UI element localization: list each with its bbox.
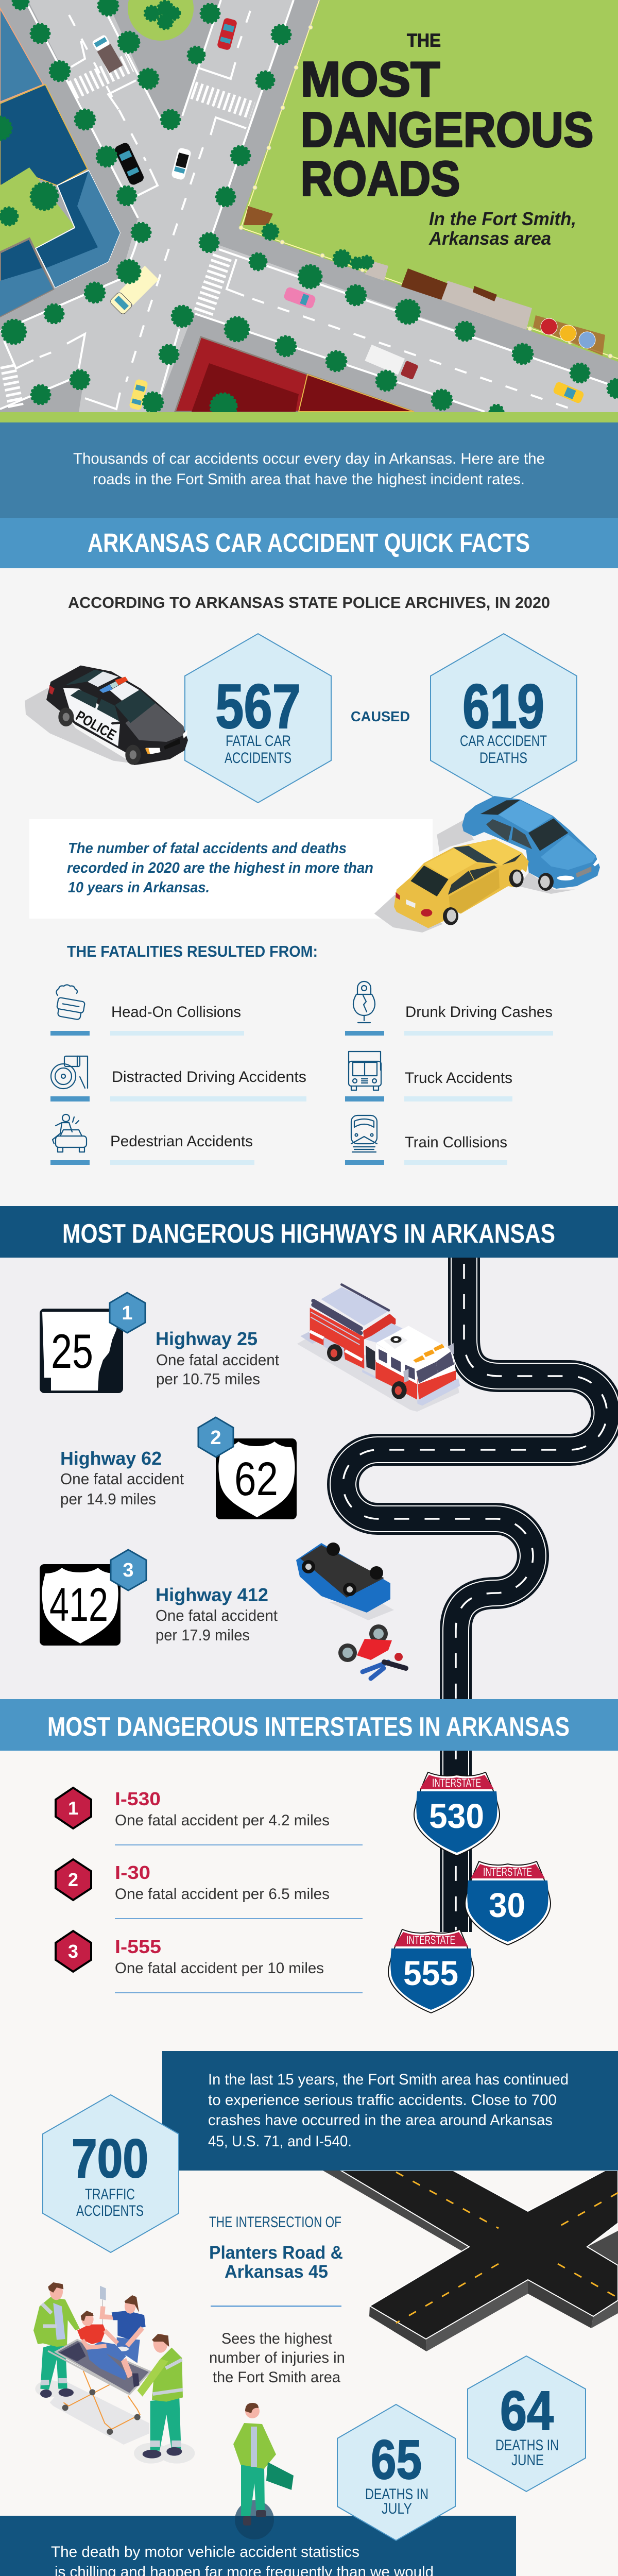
panel backgrounds — [0, 1258, 618, 2576]
green divider band — [0, 412, 618, 422]
road sign: US 412 — [40, 1564, 121, 1646]
callout: highest in 10 years: recorded in 2020 are the highest in more than — [67, 860, 373, 876]
subtitle — [428, 208, 576, 249]
highway 62 text: One fatal accident — [60, 1470, 184, 1488]
stat: 64 deaths in June — [468, 2356, 586, 2492]
highway 412 text: Highway 412 — [156, 1584, 268, 1605]
text: intersection callout — [209, 2214, 345, 2386]
list item: truck accidents — [345, 1052, 512, 1101]
illustration: overturned car — [296, 1543, 394, 1620]
highway 62 text — [60, 1448, 184, 1508]
list item: pedestrian accidents — [50, 1114, 254, 1165]
badge: 1: 1 — [122, 1302, 133, 1324]
stat: 567 fatal accidents: ACCIDENTS — [225, 750, 291, 767]
list item: distracted driving: Distracted Driving Accidents — [112, 1069, 306, 1086]
badge: 3: 3 — [68, 1941, 78, 1962]
vehicles — [92, 18, 585, 411]
heading: quick facts — [0, 518, 618, 568]
list item: distracted driving — [50, 1056, 306, 1101]
grass area — [238, 0, 618, 362]
subheading: archives: ACCORDING TO ARKANSAS STATE POLICE ARCHIVES, IN 2020 — [68, 594, 550, 612]
stat: 567 fatal accidents — [185, 634, 331, 803]
stat: 700 traffic accidents — [43, 2095, 179, 2252]
stat: 65 deaths in July: JULY — [382, 2500, 412, 2517]
panel: Fort Smith crashes: to experience serious traffic accidents. Close to 700 — [208, 2092, 557, 2109]
road sign: interstate 555 — [388, 1929, 474, 2013]
callout: highest in 10 years: The number of fatal accidents and deaths — [68, 840, 347, 857]
paramedic left — [33, 2282, 80, 2398]
panel: death statistics: The death by motor vehicle accident statistics — [51, 2544, 359, 2561]
list item: truck accidents: Truck Accidents — [405, 1070, 512, 1087]
road sign: US 62: 62 — [234, 1453, 278, 1505]
subtitle: Arkansas area — [428, 228, 551, 249]
road sign: interstate 555: INTERSTATE — [406, 1934, 455, 1946]
road edge lines — [0, 0, 618, 412]
item: highway 412 — [40, 1550, 278, 1646]
patient — [77, 2311, 140, 2387]
illustration: paramedics with stretcher — [33, 2282, 195, 2464]
highway 412 text: per 17.9 miles — [156, 1626, 250, 1644]
badge: 2 — [198, 1417, 233, 1457]
building: red — [175, 337, 414, 412]
text: intersection callout: THE INTERSECTION OF — [209, 2214, 341, 2231]
illustration: crashed cars — [374, 796, 600, 933]
highway 25 text: per 10.75 miles — [156, 1370, 260, 1388]
item: I-555: I-555 — [115, 1936, 161, 1957]
title: MOST — [301, 52, 440, 107]
illustration: fire truck — [297, 1284, 460, 1412]
paramedic in blue — [100, 2286, 146, 2363]
badge: 1 — [110, 1293, 145, 1333]
text: intersection callout: the Fort Smith area — [213, 2369, 340, 2386]
icon: truck — [349, 1052, 381, 1090]
road sign: interstate 530: INTERSTATE — [432, 1776, 481, 1789]
highway 412 text: One fatal accident — [156, 1606, 278, 1624]
stat: 64 deaths in June: 64 — [500, 2379, 554, 2442]
badge: 3 — [56, 1931, 91, 1972]
stat: 619 deaths: DEATHS — [479, 750, 527, 767]
badge: 3 — [111, 1550, 146, 1590]
panel: Fort Smith crashes: 45, U.S. 71, and I-540. — [208, 2133, 352, 2150]
list item: drunk driving — [345, 981, 553, 1036]
badge: 2: 2 — [210, 1427, 221, 1449]
list item: head-on collisions — [50, 985, 244, 1036]
connector text: caused: CAUSED — [351, 708, 410, 724]
illustration: 3D intersection — [323, 2171, 618, 2351]
item: I-30 — [56, 1859, 363, 1919]
stat: 619 deaths: 619 — [462, 671, 544, 741]
road sign: Arkansas 25 — [40, 1309, 123, 1393]
icon: overturned car — [56, 985, 85, 1020]
illustration: paramedic with bag — [233, 2403, 294, 2539]
item: I-530 — [56, 1788, 363, 1845]
road sign: US 62 — [216, 1438, 297, 1519]
panel: Fort Smith crashes: In the last 15 years, the Fort Smith area has continued — [208, 2071, 569, 2088]
heading: quick facts: ARKANSAS CAR ACCIDENT QUICK FACTS — [88, 528, 530, 557]
stat: 700 traffic accidents: 700 — [72, 2128, 148, 2189]
subtitle: In the Fort Smith, — [429, 208, 576, 229]
stat: 619 deaths: CAR ACCIDENT — [460, 733, 547, 750]
stat: 65 deaths in July: 65 — [371, 2428, 422, 2490]
stat: 65 deaths in July: DEATHS IN — [365, 2486, 428, 2503]
text: intersection callout: Sees the highest — [221, 2330, 333, 2347]
item: highway 25 — [40, 1293, 279, 1393]
item: I-530: One fatal accident per 4.2 miles — [115, 1812, 330, 1829]
umbrellas — [541, 318, 595, 348]
highway 25 text: One fatal accident — [156, 1351, 279, 1369]
panel: quick facts — [0, 518, 618, 1206]
badge: 2 — [56, 1859, 91, 1900]
heading: highways — [0, 1206, 618, 1258]
icon: wine glass — [353, 981, 375, 1023]
title — [301, 30, 593, 206]
item: I-30: One fatal accident per 6.5 miles — [115, 1886, 330, 1903]
list item: pedestrian accidents: Pedestrian Accidents — [110, 1133, 253, 1150]
callout: highest in 10 years: 10 years in Arkansas. — [68, 879, 210, 896]
highway 62 text: Highway 62 — [60, 1448, 162, 1469]
paramedic right — [138, 2334, 183, 2459]
road sign: US 412: 412 — [49, 1579, 108, 1631]
list item: head-on collisions: Head-On Collisions — [111, 1004, 241, 1021]
road sign: interstate 530: 530 — [429, 1797, 484, 1836]
list item: drunk driving: Drunk Driving Cashes — [405, 1004, 553, 1021]
stat: 567 fatal accidents: 567 — [215, 671, 301, 741]
icon: train — [351, 1115, 377, 1152]
winding road — [343, 1258, 607, 1932]
stat: 64 deaths in June: DEATHS IN — [495, 2437, 559, 2454]
title: THE — [407, 30, 441, 50]
road sign: interstate 30: 30 — [489, 1886, 525, 1925]
text: intersection callout: Planters Road & — [209, 2243, 343, 2263]
highway 25 text: Highway 25 — [156, 1328, 258, 1349]
panel: intro — [0, 422, 618, 518]
stretcher frame — [63, 2371, 140, 2429]
title: DANGEROUS — [301, 102, 593, 158]
text: intersection callout: Arkansas 45 — [225, 2262, 328, 2282]
callout: highest in 10 years — [29, 819, 433, 919]
highway 412 text — [156, 1584, 278, 1644]
item: highway 62 — [60, 1417, 297, 1519]
badge: 2: 2 — [68, 1869, 78, 1890]
panel: intro: Thousands of car accidents occur every day in Arkansas. Here are the — [73, 450, 545, 467]
heading: interstates — [0, 1699, 618, 1751]
panel: death statistics — [0, 2516, 516, 2576]
text: intersection callout: number of injuries in — [209, 2349, 345, 2366]
panel: Fort Smith crashes: crashes have occurred in the area around Arkansas — [208, 2112, 553, 2129]
panel: Fort Smith crashes — [162, 2051, 618, 2171]
roads — [0, 0, 618, 412]
badge: 1 — [56, 1788, 91, 1828]
title: ROADS — [301, 151, 460, 206]
panel: intro: roads in the Fort Smith area that have the highest incident rates. — [93, 471, 525, 488]
road sign: interstate 30: INTERSTATE — [483, 1866, 532, 1878]
item: I-555: One fatal accident per 10 miles — [115, 1960, 324, 1977]
stat: 64 deaths in June: JUNE — [511, 2452, 544, 2469]
item: I-555 — [56, 1931, 363, 1993]
badge: 3: 3 — [123, 1560, 134, 1581]
stat: 700 traffic accidents: TRAFFIC — [85, 2186, 135, 2203]
crosswalks — [8, 63, 252, 406]
icon: pedestrian hit by car — [53, 1114, 87, 1152]
road sign: Arkansas 25: 25 — [51, 1324, 93, 1378]
grass-side buildings — [244, 206, 605, 355]
stat: 567 fatal accidents: FATAL CAR — [226, 733, 291, 750]
illustration: police car: POLICE — [73, 707, 119, 743]
panel: hero street map — [0, 0, 618, 419]
highway 25 text — [156, 1328, 279, 1388]
stat: 700 traffic accidents: ACCIDENTS — [76, 2202, 144, 2219]
item: I-30: I-30 — [115, 1862, 150, 1883]
list item: train collisions — [345, 1115, 507, 1165]
buildings: blue — [0, 8, 120, 316]
item: I-530: I-530 — [115, 1788, 161, 1809]
stat: 65 deaths in July — [337, 2404, 455, 2540]
list item: train collisions: Train Collisions — [405, 1134, 507, 1151]
highway 62 text: per 14.9 miles — [60, 1490, 156, 1508]
stat: 619 deaths — [431, 634, 577, 803]
icon: steering wheel and phone — [51, 1056, 88, 1089]
traffic island — [128, 0, 194, 41]
road sign: interstate 30 — [465, 1861, 551, 1945]
illustration: motorcycle crash — [338, 1624, 406, 1679]
road sign: interstate 555: 555 — [403, 1954, 458, 1993]
badge: 1: 1 — [68, 1798, 78, 1819]
road sign: interstate 530 — [414, 1772, 500, 1856]
trees — [0, 0, 618, 419]
illustration: police car — [25, 666, 188, 765]
lane dashes — [40, 11, 572, 409]
subheading: fatalities: THE FATALITIES RESULTED FROM: — [67, 942, 318, 960]
